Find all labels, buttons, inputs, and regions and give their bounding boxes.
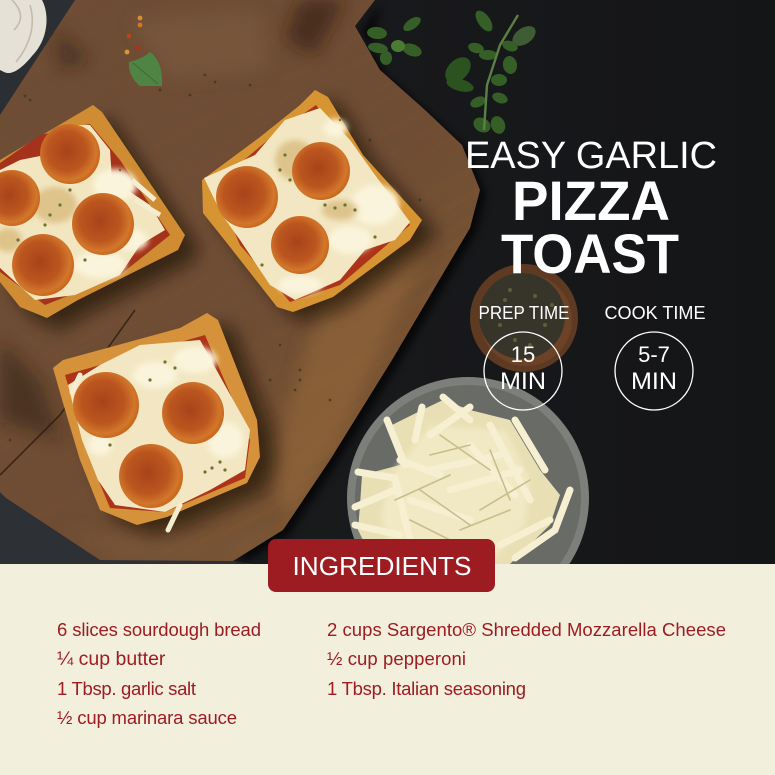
ingredients heading: INGREDIENTS <box>292 551 472 581</box>
ingredients list: left column: 1 Tbsp. garlic salt <box>57 678 196 699</box>
prep time badge: 15 <box>511 342 535 367</box>
ingredients list: right column: 1 Tbsp. Italian seasoning <box>327 678 526 699</box>
cook time badge <box>604 303 706 410</box>
ingredients list: left column <box>57 619 261 728</box>
ingredients list: right column: 2 cups Sargento® Shredded Mozzarella Cheese <box>327 619 726 640</box>
toast: bottom <box>53 313 276 535</box>
ingredients list: left column: ¼ cup butter <box>57 648 166 670</box>
cook time badge: MIN <box>631 368 677 395</box>
title: EASY GARLIC <box>465 135 717 177</box>
icon: wooden spice bowl <box>470 264 578 372</box>
title <box>465 135 717 285</box>
icon: garlic bulb <box>0 0 47 73</box>
toast: top left <box>0 105 199 330</box>
prep time badge: PREP TIME <box>478 303 570 323</box>
photo background <box>0 0 775 565</box>
ingredients heading <box>268 539 495 592</box>
title: TOAST <box>501 222 679 285</box>
wooden board <box>0 0 694 564</box>
ingredients list: right column: ½ cup pepperoni <box>327 648 466 669</box>
plate of shredded mozzarella <box>347 377 589 564</box>
ingredients list: right column <box>327 619 726 699</box>
cook time badge: 5-7 <box>638 342 670 367</box>
ingredients list: left column: ½ cup marinara sauce <box>57 707 237 728</box>
cream ingredients panel <box>0 564 775 775</box>
prep time badge <box>478 303 570 410</box>
toast: top right <box>202 90 436 322</box>
ingredients list: left column: 6 slices sourdough bread <box>57 619 261 640</box>
icon: oregano sprigs <box>367 8 539 136</box>
cook time badge: COOK TIME <box>604 303 706 323</box>
prep time badge: MIN <box>500 368 546 395</box>
title: PIZZA <box>512 169 670 232</box>
icon: basil leaf and chili flakes <box>125 16 162 86</box>
